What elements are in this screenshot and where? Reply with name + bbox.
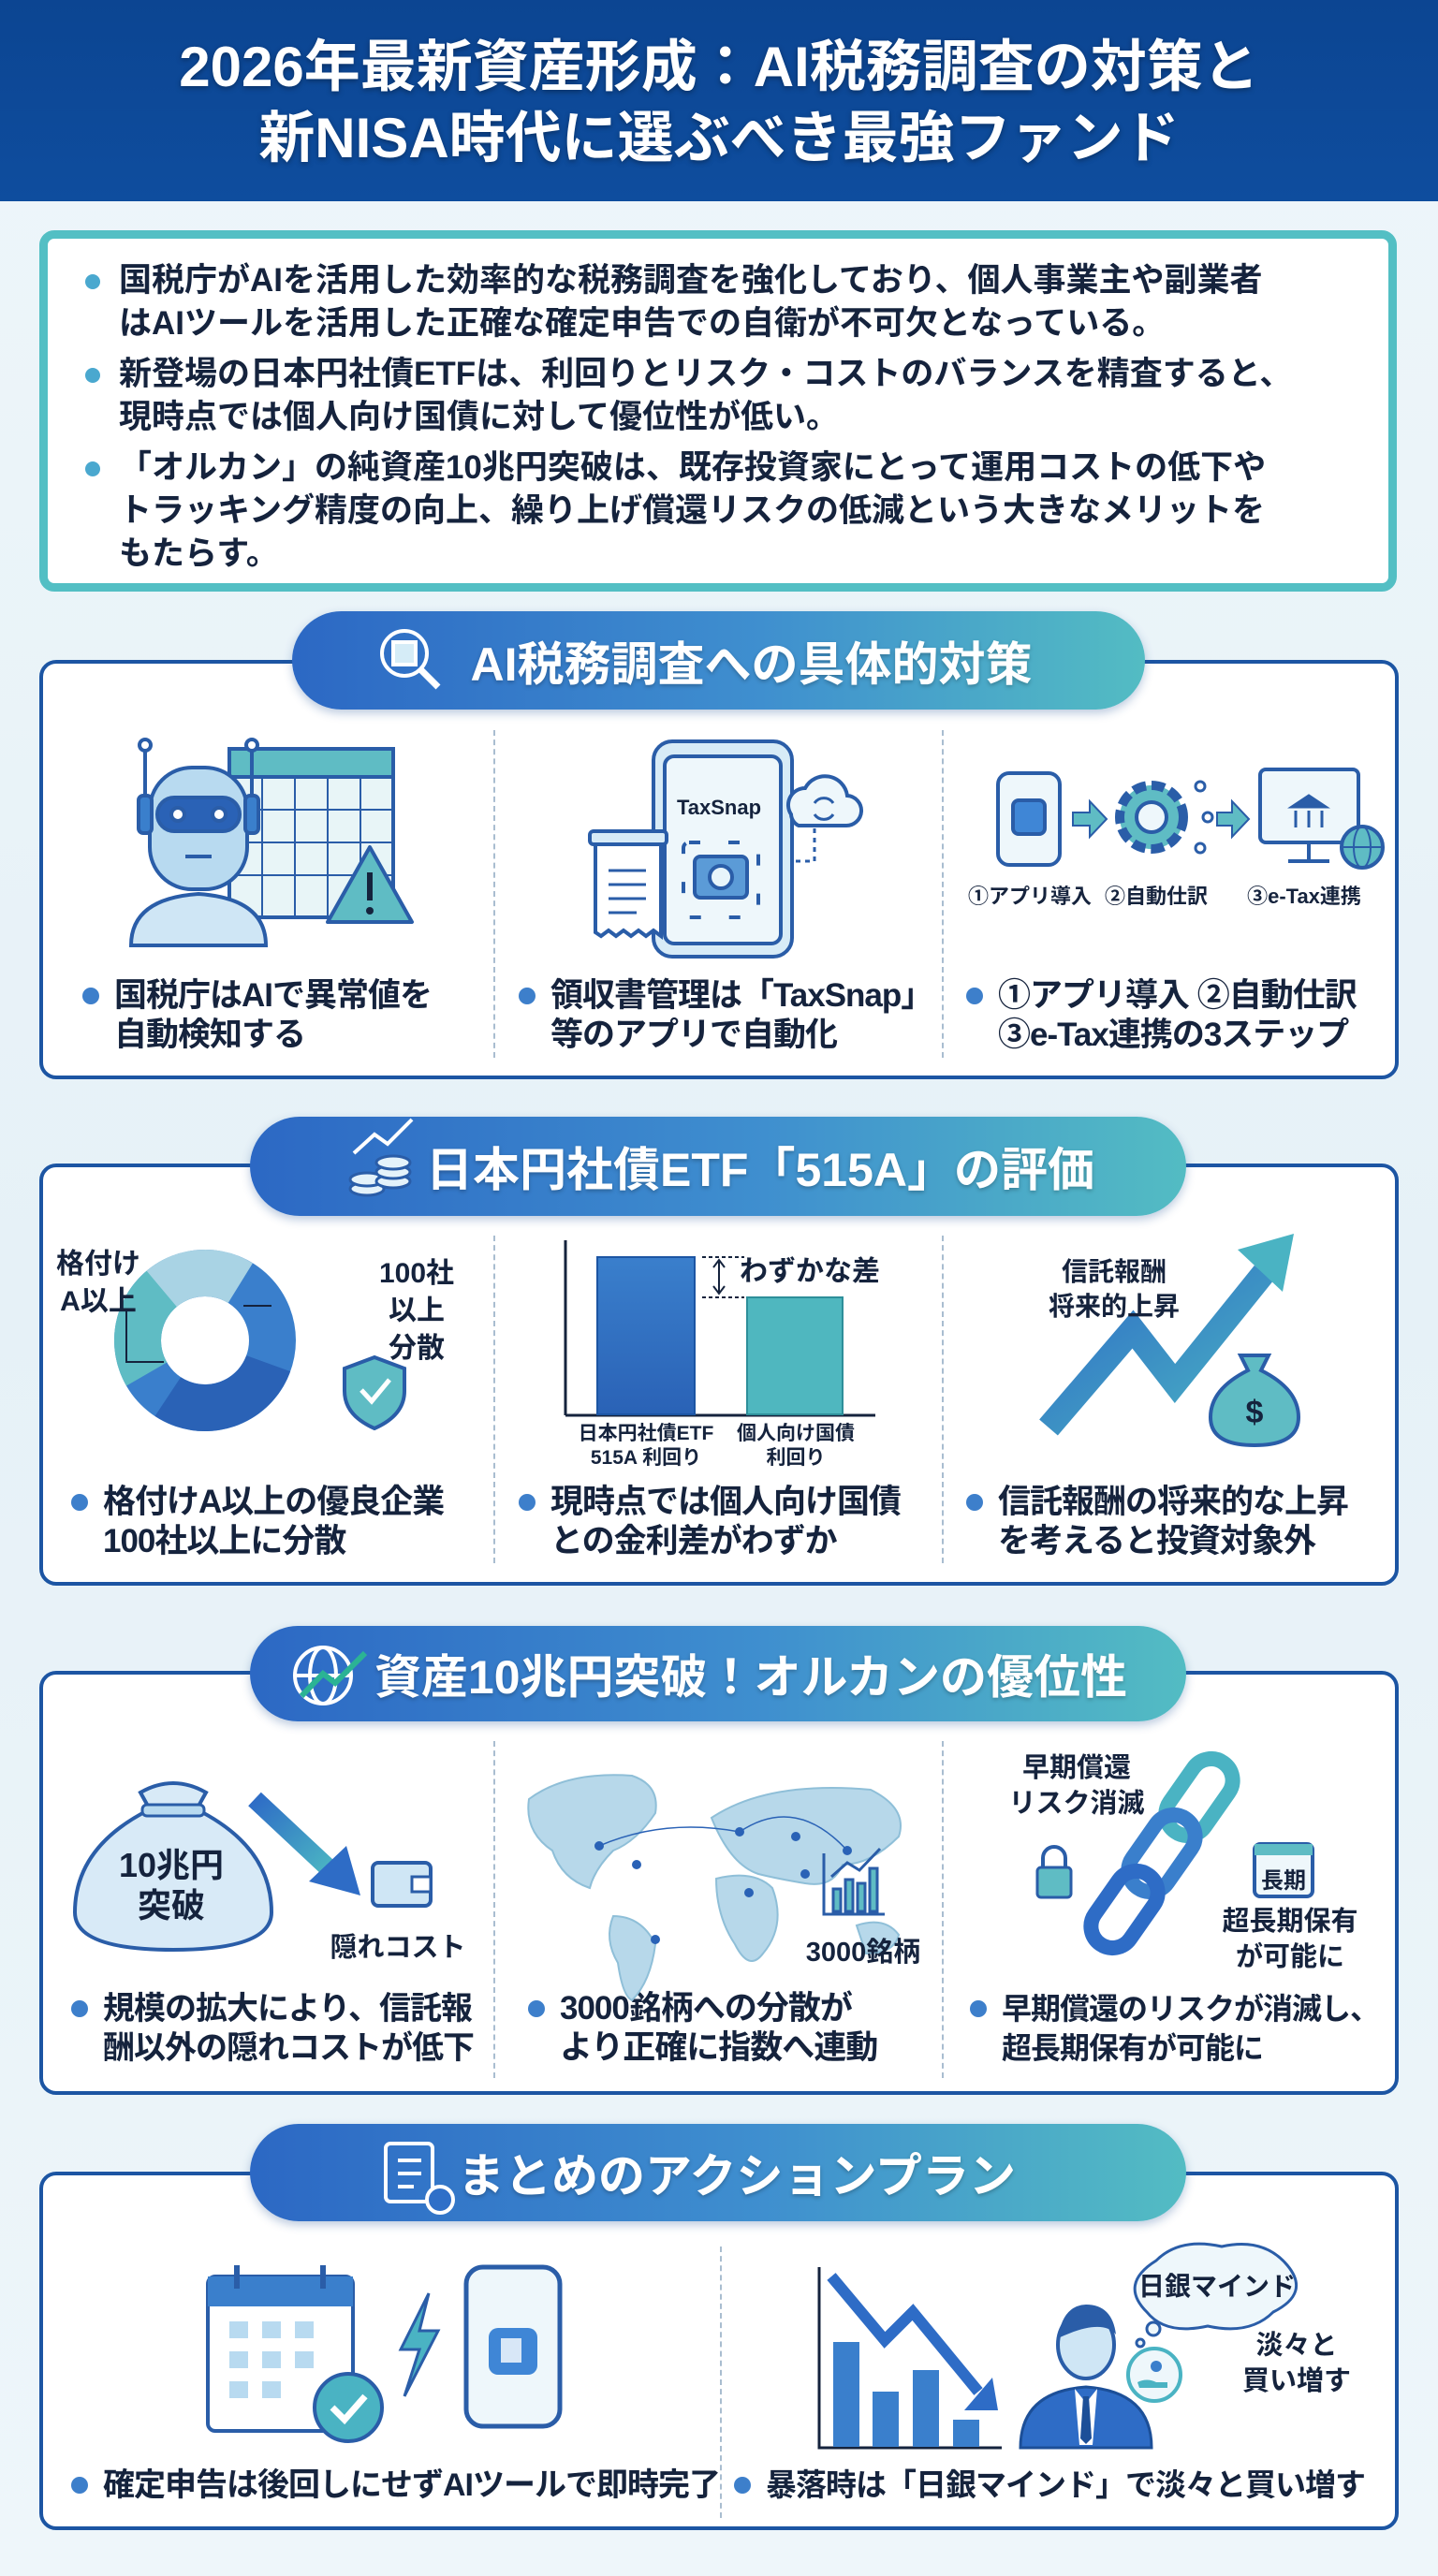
caption s1c1 [79, 976, 432, 1055]
caption s3c2 [524, 1989, 877, 2068]
caption s3c3: 超長期保有が可能に [1002, 2031, 1263, 2065]
heading: AI tax audit [292, 611, 1145, 710]
icon: globe arrow [295, 1647, 365, 1704]
caption s4c1: 確定申告は後回しにせずAIツールで即時完了 [103, 2467, 720, 2503]
caption s3c3 [966, 1989, 1379, 2068]
chart: fee rising arrow [1049, 1234, 1299, 1445]
title header: 新NISA時代に選ぶべき最強ファンド [258, 107, 1180, 169]
chart: fee rising arrow: $ [1246, 1395, 1264, 1430]
heading: AI tax audit: AI税務調査への具体的対策 [470, 638, 1032, 691]
chart: donut rating: A以上 [60, 1286, 137, 1317]
summary point 2: 現時点では個人向け国債に対して優位性が低い。 [119, 399, 839, 435]
icon: world map: 3000銘柄 [806, 1937, 920, 1968]
icon: coins chart [350, 1120, 412, 1195]
chart: donut rating: 以上 [389, 1295, 445, 1326]
heading: all-country [250, 1626, 1186, 1721]
summary point 2: 新登場の日本円社債ETFは、利回りとリスク・コストのバランスを精査すると、 [119, 356, 1292, 392]
icon: chain lock calendar: 超長期保有 [1222, 1906, 1358, 1937]
caption s2c1 [67, 1483, 444, 1561]
chart: yield bars: 515A 利回り [591, 1447, 701, 1469]
icon: chain lock calendar [1008, 1750, 1358, 1972]
summary box [39, 230, 1397, 592]
heading: ETF: 日本円社債ETF「515A」の評価 [426, 1144, 1094, 1196]
title header: 2026年最新資産形成：AI税務調査の対策と [179, 36, 1259, 98]
icon: TaxSnap phone [590, 741, 861, 957]
icon: chain lock calendar: が可能に [1236, 1940, 1344, 1972]
chart: fee rising arrow: 信託報酬 [1062, 1257, 1167, 1286]
caption s1c2: 領収書管理は「TaxSnap」 [550, 977, 932, 1014]
icon: checklist clock [386, 2144, 453, 2213]
caption s3c1: 酬以外の隠れコストが低下 [103, 2030, 474, 2066]
summary point 3: 「オルカン」の純資産10兆円突破は、既存投資家にとって運用コストの低下や [119, 449, 1266, 486]
caption s3c1 [67, 1989, 474, 2068]
icon: crash and investor: 淡々と [1255, 2330, 1338, 2361]
caption s1c3: ①アプリ導入 ②自動仕訳 [998, 977, 1357, 1014]
panel: AI tax audit [39, 660, 1399, 1079]
summary point 1 [83, 259, 1360, 345]
chart: donut rating: 分散 [389, 1333, 445, 1364]
icon: world map [528, 1775, 920, 2000]
summary point 1: はAIツールを活用した正確な確定申告での自衛が不可欠となっている。 [119, 305, 1165, 342]
caption s3c3: 早期償還のリスクが消滅し、 [1002, 1992, 1379, 2026]
caption s2c2: との金利差がわずか [550, 1523, 837, 1559]
caption s3c2: より正確に指数へ連動 [560, 2029, 877, 2066]
icon: money bag 10 trillion [75, 1783, 466, 1963]
caption s1c3 [962, 976, 1357, 1055]
icon: calendar phone [208, 2265, 560, 2441]
caption s1c1: 自動検知する [114, 1017, 305, 1053]
icon: chain lock calendar: 早期償還 [1022, 1752, 1131, 1783]
icon: money bag 10 trillion: 隠れコスト [330, 1932, 466, 1963]
summary point 2 [83, 353, 1360, 439]
summary point 3: もたらす。 [119, 535, 279, 572]
panel: ETF 515A [39, 1164, 1399, 1586]
panel: action plan [39, 2172, 1399, 2530]
caption s2c2 [515, 1483, 901, 1561]
caption s2c1: 格付けA以上の優良企業 [103, 1484, 444, 1520]
icon: audit magnifier [382, 631, 438, 687]
caption s2c3 [962, 1483, 1348, 1561]
summary point 1: 国税庁がAIを活用した効率的な税務調査を強化しており、個人事業主や副業者 [119, 262, 1263, 299]
summary point 3 [83, 446, 1360, 576]
summary point 3: トラッキング精度の向上、繰り上げ償還リスクの低減という大きなメリットを [119, 492, 1265, 529]
icon: chain lock calendar: 長期 [1261, 1868, 1306, 1894]
caption s3c2: 3000銘柄への分散が [560, 1990, 852, 2027]
icon: 3 step flow [968, 769, 1383, 908]
panel: all-country [39, 1671, 1399, 2095]
icon: crash and investor: 買い増す [1242, 2365, 1351, 2396]
chart: fee rising arrow: 将来的上昇 [1049, 1292, 1180, 1321]
caption s2c2: 現時点では個人向け国債 [550, 1484, 901, 1520]
heading: all-country: 資産10兆円突破！オルカンの優位性 [374, 1651, 1127, 1704]
caption s3c1: 規模の拡大により、信託報 [103, 1991, 472, 2027]
chart: donut rating: 格付け [56, 1249, 140, 1280]
caption s1c2: 等のアプリで自動化 [550, 1017, 837, 1053]
chart: donut rating: 100社 [379, 1258, 454, 1289]
icon: crash and investor [819, 2244, 1351, 2448]
heading: action plan [250, 2124, 1186, 2221]
icon: TaxSnap phone: TaxSnap [677, 796, 761, 819]
caption s4c2: 暴落時は「日銀マインド」で淡々と買い増す [766, 2467, 1365, 2502]
caption s2c1: 100社以上に分散 [103, 1523, 345, 1559]
icon: robot with table [131, 739, 412, 945]
heading: action plan: まとめのアクションプラン [458, 2150, 1016, 2203]
chart: yield bars: わずかな差 [740, 1256, 880, 1287]
caption s2c3: を考えると投資対象外 [998, 1523, 1315, 1559]
caption s1c3: ③e-Tax連携の3ステップ [998, 1017, 1348, 1053]
chart: yield bars: 個人向け国債 [737, 1423, 855, 1444]
chart: yield bars: 日本円社債ETF [579, 1423, 713, 1444]
icon: money bag 10 trillion: 突破 [138, 1886, 205, 1925]
title header [0, 0, 1438, 201]
chart: yield bars: 利回り [766, 1447, 826, 1469]
icon: crash and investor: 日銀マインド [1138, 2272, 1296, 2301]
caption s1c1: 国税庁はAIで異常値を [114, 977, 432, 1014]
caption s1c2 [515, 976, 932, 1055]
heading: ETF [250, 1117, 1186, 1216]
icon: 3 step flow: ①アプリ導入 [968, 885, 1092, 908]
chart: donut rating [56, 1246, 454, 1435]
chart: yield bars [565, 1240, 880, 1469]
icon: 3 step flow: ②自動仕訳 [1105, 885, 1208, 908]
icon: 3 step flow: ③e-Tax連携 [1247, 885, 1361, 908]
icon: money bag 10 trillion: 10兆円 [119, 1846, 224, 1884]
icon: chain lock calendar: リスク消滅 [1008, 1788, 1145, 1819]
caption s2c3: 信託報酬の将来的な上昇 [998, 1484, 1348, 1520]
